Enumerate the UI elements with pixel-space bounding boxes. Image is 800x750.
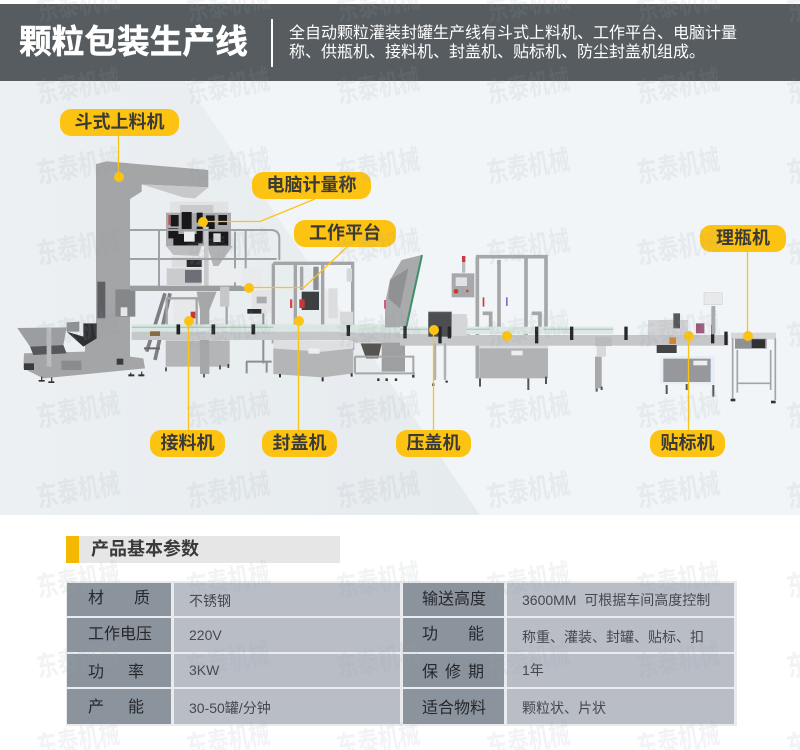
watermarks: 东泰机械 [634,64,723,110]
watermarks: 东泰机械 [484,388,573,434]
parameter table: 不锈钢 [189,593,231,609]
hero background [0,81,800,515]
label: computer weigher: 电脑计量称 [266,175,356,195]
catch machine [166,297,227,338]
label: hopper loader [60,109,179,136]
watermarks: 东泰机械 [184,388,273,434]
parameter table: 保修期 [422,664,491,681]
watermarks: 东泰机械 [334,468,423,514]
watermarks: 东泰机械 [484,638,573,684]
bottle table [731,333,776,339]
parameter table: 工作电压 [88,626,152,643]
label: capping machine [262,430,337,457]
watermarks: 东泰机械 [634,558,723,604]
watermarks: 东泰机械 [34,144,123,190]
label: cap press [396,430,471,457]
watermarks: 东泰机械 [34,307,123,353]
watermarks: 东泰机械 [184,468,273,514]
weigher head [170,202,228,212]
section heading [66,536,340,563]
watermarks: 东泰机械 [184,638,273,684]
parameter table: 功 率 [88,664,144,681]
parameter table: 材 质 [88,590,150,607]
watermarks: 东泰机械 [484,468,573,514]
watermarks: 东泰机械 [334,558,423,604]
description: 全自动颗粒灌装封罐生产线有斗式上料机、工作平台、电脑计量 [289,25,737,42]
label: hopper loader: 斗式上料机 [74,112,164,132]
parameter table: 30-50罐/分钟 [189,700,271,716]
parameter table: 220V [189,627,222,643]
description [289,24,737,61]
parameter table: 功 能 [422,626,484,643]
parameter table: 输送高度 [422,591,486,608]
section heading: 产品基本参数 [91,539,199,559]
watermarks: 东泰机械 [34,468,123,514]
title: 颗粒包装生产线 [19,23,248,60]
capper, labeller and bottle table [400,256,776,403]
parameter table [66,581,737,726]
watermarks: 东泰机械 [34,638,123,684]
watermarks: 东泰机械 [634,225,723,271]
watermarks: 东泰机械 [634,307,723,353]
watermarks: 东泰机械 [634,144,723,190]
label: bottle sorter [700,225,786,252]
capping machine [273,263,353,350]
watermarks: 东泰机械 [484,558,573,604]
watermarks: 东泰机械 [334,144,423,190]
header band [0,4,800,81]
label: labeller [650,430,725,457]
watermarks: 东泰机械 [184,225,273,271]
parameter table: 3KW [189,662,219,678]
packaging line machinery illustration [18,161,776,404]
label: receiving machine [150,430,225,457]
watermarks: 东泰机械 [184,64,273,110]
watermarks: 东泰机械 [484,144,573,190]
parameter table: 3600MM 可根据车间高度控制 [522,592,710,608]
watermarks: 东泰机械 [184,558,273,604]
bottle cap elevator [340,255,470,386]
watermarks: 东泰机械 [184,144,273,190]
watermarks: 东泰机械 [34,225,123,271]
callout leaders and dots [114,136,753,430]
watermarks: 东泰机械 [634,388,723,434]
watermarks: 东泰机械 [334,388,423,434]
parameter table: 适合物料 [422,700,486,717]
label: cap press: 压盖机 [406,433,460,453]
description: 称、供瓶机、接料机、封盖机、贴标机、防尘封盖机组成。 [289,44,705,61]
watermarks: 东泰机械 [634,468,723,514]
label: capping machine: 封盖机 [272,433,326,453]
watermarks: 东泰机械 [484,64,573,110]
bucket elevator and weigher [17,161,400,383]
label: labeller: 贴标机 [660,433,714,453]
watermarks: 东泰机械 [184,307,273,353]
watermarks: 东泰机械 [484,307,573,353]
watermarks: 东泰机械 [34,64,123,110]
watermarks: 东泰机械 [334,307,423,353]
watermarks: 东泰机械 [484,225,573,271]
parameter table: 颗粒状、片状 [522,700,606,716]
watermarks: 东泰机械 [334,225,423,271]
label: work platform [294,220,396,247]
watermarks: 东泰机械 [334,638,423,684]
label: work platform: 工作平台 [309,223,381,243]
watermarks: 东泰机械 [34,388,123,434]
platform railing [130,229,279,287]
label: receiving machine: 接料机 [160,433,214,453]
watermarks: 东泰机械 [34,558,123,604]
parameter table: 称重、灌装、封罐、贴标、扣 [522,629,704,645]
parameter table: 产 能 [88,699,144,716]
parameter table: 1年 [522,662,544,678]
label: computer weigher [252,172,371,199]
label: bottle sorter: 理瓶机 [716,228,770,248]
watermarks: 东泰机械 [334,64,423,110]
conveyor [132,332,400,340]
watermarks: 东泰机械 [634,638,723,684]
